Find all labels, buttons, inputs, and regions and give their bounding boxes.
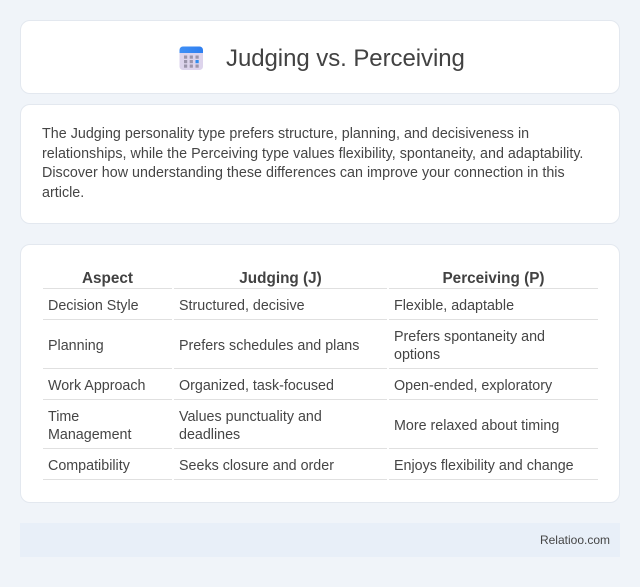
header: Judging: Judging (J) [239,270,322,287]
row: Work Approach: Organized, task-focused [179,378,334,394]
footer bar [20,523,620,557]
row: Compatibility: Seeks closure and order [179,458,334,474]
row: Time Management: Management [48,427,131,443]
panel: introduction [20,104,620,224]
row: Time Management: More relaxed about timing [394,418,559,434]
row: Compatibility [48,458,574,474]
row: Decision Style [48,298,514,314]
table header [82,270,544,287]
header: Aspect: Aspect [82,270,133,287]
row: Compatibility: Compatibility [48,458,130,474]
row: Planning [48,329,545,363]
row: Planning: Planning [48,338,104,354]
row: Planning: Prefers schedules and plans [179,338,359,354]
intro text: article. [42,185,84,201]
row: Work Approach: Work Approach [48,378,145,394]
panel: title card [20,20,620,94]
row: Time Management: deadlines [179,427,240,443]
row: Work Approach: Open-ended, exploratory [394,378,552,394]
intro text [42,126,583,201]
intro text: relationships, while the Perceiving type values flexibility, spontaneity, and adaptability. [42,146,583,162]
row: Time Management: Time [48,409,79,425]
header: Perceiving: Perceiving (P) [442,270,544,287]
row: Planning: options [394,347,440,363]
row: Time Management [48,409,559,443]
panel: comparison table [20,244,620,503]
row: Compatibility: Enjoys flexibility and change [394,458,574,474]
intro text: Discover how understanding these differences can improve your connection in this [42,165,565,181]
icon: calendar [180,46,203,70]
row: Work Approach [48,378,552,394]
footer text: source: Relatioo.com [540,533,610,547]
row: Time Management: Values punctuality and [179,409,322,425]
row: Decision Style: Structured, decisive [179,298,305,314]
row: Planning: Prefers spontaneity and [394,329,545,345]
row: Decision Style: Decision Style [48,298,139,314]
title: Judging vs. Perceiving [226,45,465,72]
row: Decision Style: Flexible, adaptable [394,298,514,314]
intro text: The Judging personality type prefers structure, planning, and decisiveness in [42,126,529,142]
